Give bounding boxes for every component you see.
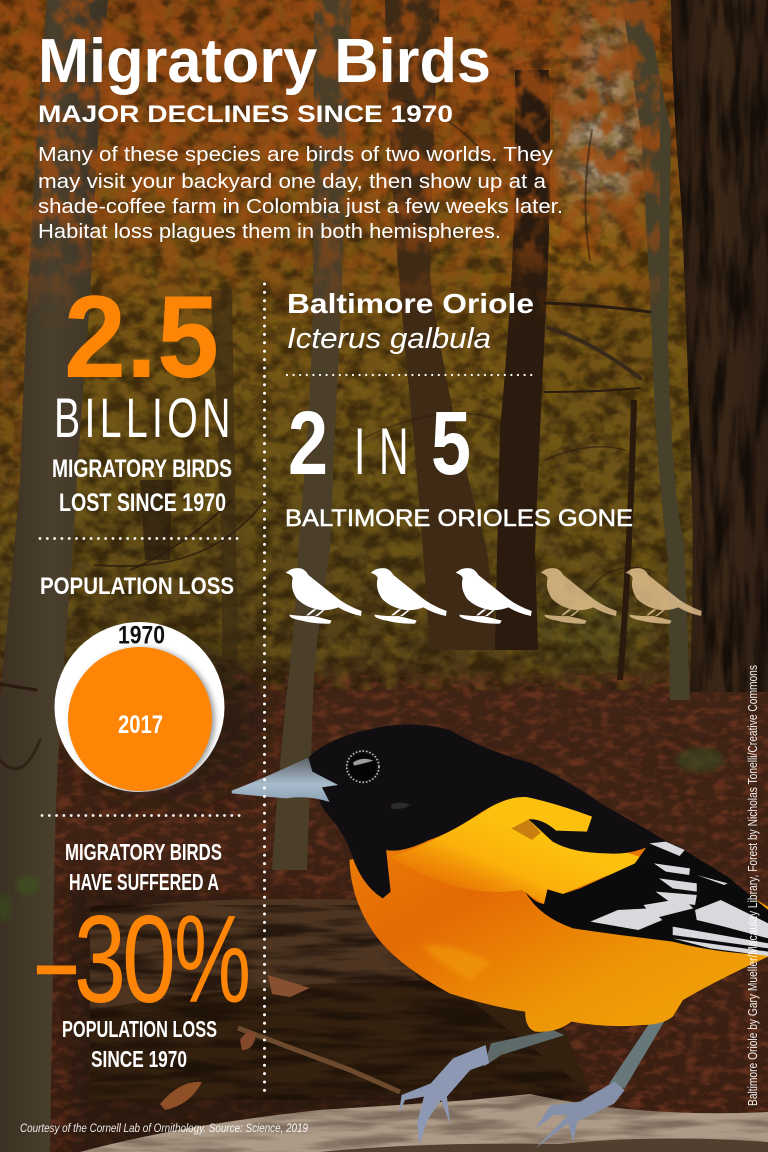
intro paragraph: may visit your backyard one day, then show up at a xyxy=(38,170,547,193)
subtitle: MAJOR DECLINES SINCE 1970 xyxy=(38,101,453,128)
oriole yellow shoulder xyxy=(391,797,639,904)
photo credit: Baltimore Oriole by Gary Mueller/Macaulay Library, Forest by Nicholas Tonelli/Creative Commons xyxy=(745,665,760,1106)
stat: -30% population loss xyxy=(33,839,251,1072)
icon: bird 2 xyxy=(371,568,447,624)
trunks xyxy=(0,0,108,1152)
species name: Icterus galbula xyxy=(287,323,491,355)
oriole photo xyxy=(232,725,768,1148)
source credit: Courtesy of the Cornell Lab of Ornithology. Source: Science, 2019 xyxy=(20,1121,308,1135)
stat label: BALTIMORE ORIOLES GONE xyxy=(285,505,633,532)
stat: -30% population loss: HAVE SUFFERED A xyxy=(69,869,219,895)
stat: 2 in 5 xyxy=(288,394,471,494)
stat: 2.5 billion: LOST SINCE 1970 xyxy=(59,489,226,517)
stat: 2 in 5: IN xyxy=(354,414,409,488)
chart: nested population circles xyxy=(54,622,224,792)
stat: -30% population loss: SINCE 1970 xyxy=(91,1046,187,1072)
icon: bird 3 xyxy=(456,568,532,624)
oriole wing feather bars xyxy=(590,842,768,956)
intro paragraph: Many of these species are birds of two worlds. They xyxy=(38,143,554,166)
icon: bird 1 xyxy=(286,568,362,624)
chart: nested population circles: 2017 xyxy=(118,711,163,739)
title: Migratory Birds xyxy=(38,27,491,96)
stat: -30% population loss: 3 xyxy=(74,891,126,1029)
oriole wing xyxy=(525,845,768,955)
stat: -30% population loss: 0 xyxy=(122,891,176,1029)
stat: 2.5 billion xyxy=(52,271,232,517)
oriole eye xyxy=(347,751,379,782)
stat: 2.5 billion: BILLION xyxy=(54,387,230,450)
heading: population loss: POPULATION LOSS xyxy=(40,573,234,600)
bottom perch log xyxy=(80,1094,768,1152)
intro paragraph: shade-coffee farm in Colombia just a few weeks later. xyxy=(38,195,563,218)
intro paragraph: Habitat loss plagues them in both hemispheres. xyxy=(38,220,501,243)
icons: five bird silhouettes xyxy=(286,568,702,624)
stat: 2.5 billion: MIGRATORY BIRDS xyxy=(52,455,232,483)
species name xyxy=(287,288,534,355)
stat: 2.5 billion: 2.5 xyxy=(64,271,219,402)
species name: Baltimore Oriole xyxy=(287,288,534,319)
forest floor leaf litter xyxy=(0,675,768,1152)
icon: bird 5 faded xyxy=(626,568,702,624)
branches xyxy=(0,100,650,769)
vertical dotted divider xyxy=(263,284,266,1098)
intro paragraph xyxy=(38,143,563,243)
logs and floor xyxy=(70,880,600,1152)
stat: -30% population loss: % xyxy=(174,891,251,1029)
stat: 2 in 5: 5 xyxy=(431,394,471,494)
oriole black head and back xyxy=(307,725,676,898)
oriole legs and feet xyxy=(399,1017,665,1148)
stat: 2 in 5: 2 xyxy=(288,394,328,494)
oriole beak xyxy=(232,757,338,802)
upper canopy leaves over trunks xyxy=(0,0,660,330)
stat: -30% population loss: − xyxy=(33,900,80,1038)
oriole orange body xyxy=(349,800,768,1032)
chart: nested population circles: 1970 xyxy=(118,622,165,650)
stat: -30% population loss: MIGRATORY BIRDS xyxy=(65,839,222,865)
stat: -30% population loss: POPULATION LOSS xyxy=(62,1016,217,1042)
icon: bird 4 faded xyxy=(541,568,617,624)
